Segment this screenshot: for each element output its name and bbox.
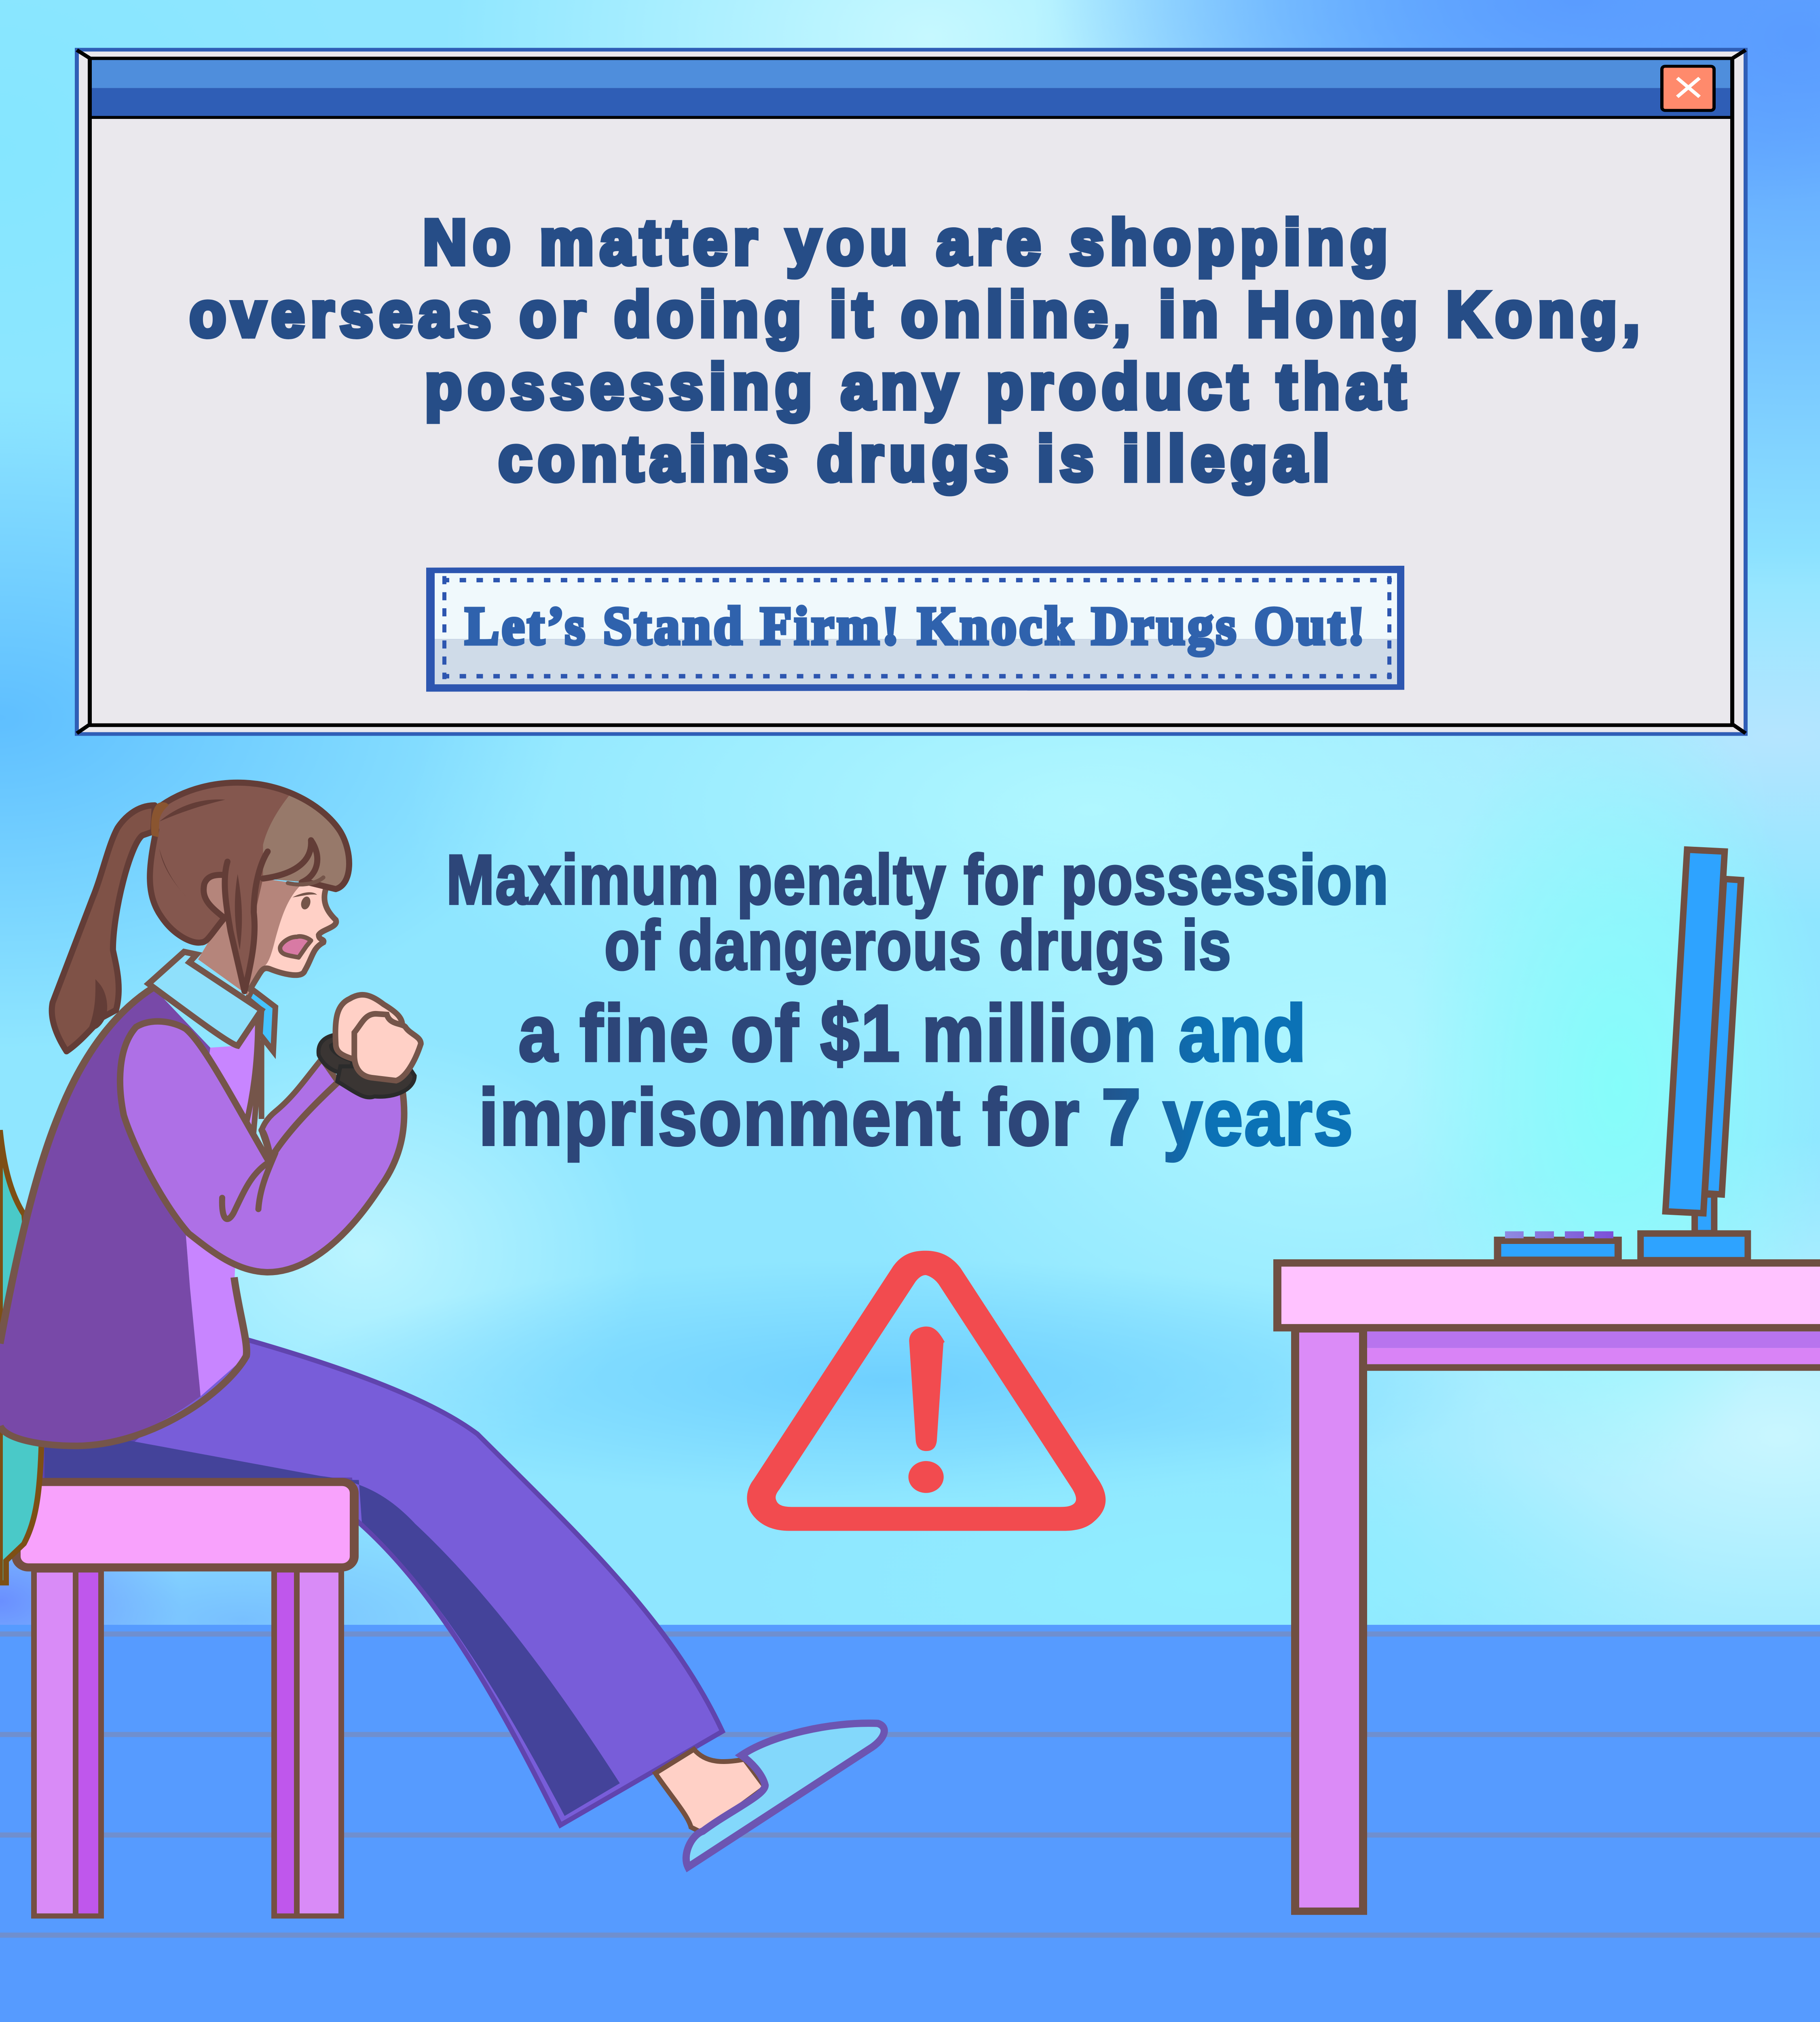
slogan button: Let’s Stand Firm! Knock Drugs Out! xyxy=(465,596,1368,656)
heading: warning message: contains drugs is illegal xyxy=(499,423,1336,494)
icon: close button xyxy=(1662,66,1714,110)
face and neck xyxy=(198,879,336,995)
chair back edge xyxy=(0,1130,42,1583)
collar front xyxy=(148,952,262,1046)
desk leg and rail xyxy=(1295,1329,1820,1911)
far arm xyxy=(262,1059,340,1158)
penalty text: Maximum penalty for possession xyxy=(446,841,1389,919)
foot and slipper xyxy=(655,1723,884,1867)
sleeve xyxy=(120,1022,404,1272)
heading: warning message: possessing any product that xyxy=(425,351,1412,422)
fists xyxy=(335,995,421,1081)
desk with computer xyxy=(1277,850,1820,1911)
stool xyxy=(16,1482,354,1916)
penalty text: imprisonment for 7 years xyxy=(479,1072,1354,1162)
hair xyxy=(150,783,349,991)
penalty text xyxy=(446,841,1389,1162)
heading: warning message xyxy=(190,207,1646,494)
trousers xyxy=(44,1340,723,1825)
torso xyxy=(0,988,257,1446)
penalty text: a fine of $1 million and xyxy=(518,988,1307,1078)
penalty text: of dangerous drugs is xyxy=(605,907,1232,984)
computer xyxy=(1498,850,1748,1260)
heading: warning message: No matter you are shopping xyxy=(423,207,1394,277)
keyboard keys xyxy=(1505,1231,1613,1238)
floor xyxy=(0,1625,1820,2022)
figure: woman in handcuffs on stool xyxy=(0,783,884,1916)
icon: warning triangle xyxy=(747,1251,1106,1531)
panel: alert window xyxy=(77,50,1746,734)
ponytail xyxy=(52,805,155,1051)
handcuffs xyxy=(319,1034,415,1098)
desk top xyxy=(1277,1263,1820,1328)
slogan button xyxy=(426,566,1404,692)
collar back xyxy=(246,990,275,1130)
